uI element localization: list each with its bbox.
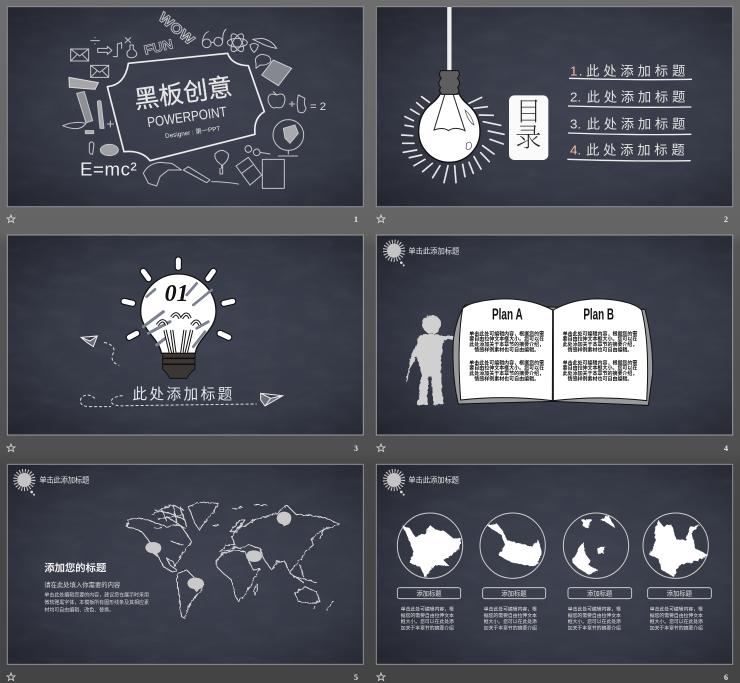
list item 1: 此 处 添 加 标 题 [586, 64, 685, 79]
formula: E=mc² [80, 159, 137, 180]
paper plane left [81, 336, 97, 347]
region circle 2 [480, 513, 545, 578]
contents card [509, 95, 548, 160]
column text 3: 单击此处可编辑内容，根 [568, 605, 621, 612]
doodle: globe [273, 120, 304, 156]
slide 1 star icon [7, 215, 15, 222]
heading: 添加您的标题 [44, 561, 107, 574]
chalk person [406, 315, 460, 405]
panel: slide 1 cover [7, 7, 363, 207]
slide 2 star icon [377, 215, 385, 222]
bulb glass [141, 274, 216, 353]
bulb rays [124, 260, 233, 337]
Plan B text: 单击此处可编辑内容，根据您的需 [563, 359, 637, 366]
slide 6 number: 6 [724, 673, 728, 682]
doodles: ruler, pencil, plus [77, 92, 113, 128]
doodle: apple and pear equation [268, 92, 326, 113]
body text [44, 592, 149, 614]
Plan A text: 要自由拉伸文本框大小。您可以在 [469, 365, 544, 372]
list item 3: 此 处 添 加 标 题 [587, 116, 685, 131]
Plan B text [563, 330, 637, 382]
right page [553, 299, 648, 401]
column text 3: 框大小。您可以在此处添 [568, 618, 621, 625]
slide 5 number: 5 [354, 673, 358, 682]
doodles: envelopes [71, 49, 109, 77]
Plan B text: 要自由拉伸文本框大小。您可以在 [563, 336, 637, 343]
doodle: glasses [202, 29, 226, 48]
doodles: stone, clip, leaf, eraser [63, 122, 118, 156]
body text: 材均可自由编辑、改色、替换。 [44, 607, 114, 614]
bulb scribble shading [143, 283, 212, 347]
doodle: FUN: FUN [142, 36, 174, 58]
column text 1 [401, 605, 454, 631]
panel: slide 4 plans [376, 235, 733, 435]
logo splat [15, 471, 35, 496]
label button 3 [568, 588, 632, 599]
slide 4 star icon [377, 444, 385, 452]
contents heading: 目 [515, 92, 541, 129]
doodle: tablet [262, 159, 284, 188]
left page [459, 299, 553, 401]
dashed trail [104, 342, 119, 365]
column text 4: 加关于本章节的摘要介绍 [650, 624, 703, 631]
Plan B text: 此处添加关于本章节的摘要介绍， [563, 341, 637, 348]
bulb cap [439, 71, 460, 94]
bulb base [163, 353, 195, 378]
Plan A text: 情感样例素材也可自由编辑。 [474, 346, 539, 353]
open book cover [453, 305, 653, 405]
doodle: stacked books [236, 157, 262, 185]
label button 1 [397, 588, 461, 599]
doodles: math and music symbols [91, 37, 137, 58]
list item 2: 此 处 添 加 标 题 [587, 90, 685, 105]
list item 2: 2. [570, 90, 581, 105]
list item 4: 4. [570, 142, 581, 157]
slide 5 star icon [7, 673, 15, 680]
subheading: 请在此处填入你需要的内容 [44, 580, 121, 589]
section title: 此处添加标题 [132, 386, 233, 403]
panel: slide 3 section title [7, 235, 363, 435]
body text: 单击此处编辑您要的内容，建议您在展示时采用 [44, 592, 149, 599]
Plan B text: 此处添加关于本章节的摘要介绍， [563, 370, 637, 377]
Plan B text: 单击此处可编辑内容，根据您的需 [563, 330, 637, 337]
column text 2: 框大小。您可以在此处添 [484, 618, 537, 625]
map markers [145, 512, 291, 592]
column text 4: 单击此处可编辑内容，根 [650, 605, 703, 612]
body text: 微软雅黑字体，本模板所有图形线条及其相应素 [44, 599, 149, 606]
filament [157, 314, 200, 354]
doodle: map scribble [143, 162, 182, 186]
column text 3: 据您的需要自由拉伸文本 [568, 612, 621, 619]
Plan A text: 单击此处可编辑内容，根据您的需 [469, 330, 544, 337]
label button 4: 添加标题 [667, 588, 693, 597]
subtitle: POWERPOINT [146, 103, 228, 130]
Plan A text: 要自由拉伸文本框大小。您可以在 [469, 336, 544, 343]
label button 2 [483, 588, 546, 599]
region circle 4 [643, 513, 708, 578]
column text 2: 单击此处可编辑内容，根 [484, 605, 537, 612]
bulb highlight [465, 110, 474, 150]
list item 3 [568, 116, 691, 135]
column text 1: 框大小。您可以在此处添 [401, 618, 454, 625]
cord [447, 7, 452, 72]
Plan B text: 情感样例素材也可自由编辑。 [568, 375, 632, 382]
slide title: 单击此添加标题 [408, 246, 460, 255]
logo splat [385, 242, 405, 266]
list item 2 [568, 90, 691, 107]
light rays [402, 97, 504, 183]
column text 3 [568, 605, 621, 631]
doodle: atom [227, 32, 247, 53]
number 01: 01 [165, 281, 189, 307]
title frame [107, 53, 264, 161]
doodle: speech bubble [255, 54, 271, 68]
column text 4: 框大小。您可以在此处添 [650, 618, 703, 625]
region circle 3 [563, 513, 629, 578]
column text 1: 据您的需要自由拉伸文本 [401, 612, 454, 619]
designer credit: Designer : 第一PPT [164, 123, 221, 140]
bulb filament [434, 95, 465, 131]
Plan A heading: Plan A [492, 307, 523, 324]
doodle: sheet music [69, 77, 98, 89]
column text 1: 加关于本章节的摘要介绍 [401, 624, 454, 631]
list item 4: 此 处 添 加 标 题 [586, 142, 685, 157]
label button 3: 添加标题 [587, 588, 613, 597]
contents heading second char: 录 [515, 118, 541, 155]
column text 2: 加关于本章节的摘要介绍 [484, 624, 537, 631]
Plan A text [469, 330, 544, 382]
Plan A text: 单击此处可编辑内容，根据您的需 [469, 359, 544, 366]
column text 2: 据您的需要自由拉伸文本 [484, 612, 537, 619]
doodle: brush and heart [250, 38, 277, 52]
light bulb [419, 94, 480, 162]
slide 4 number: 4 [724, 444, 728, 453]
Plan B text: 要自由拉伸文本框大小。您可以在 [563, 365, 637, 372]
doodle: WOW: WOW [156, 9, 198, 48]
slide 3 number: 3 [354, 444, 358, 453]
label button 2: 添加标题 [501, 588, 527, 597]
slide title: 单击此添加标题 [39, 476, 90, 485]
column text 3: 加关于本章节的摘要介绍 [568, 624, 621, 631]
column text 1: 单击此处可编辑内容，根 [401, 605, 454, 612]
Plan B text: 情感样例素材也可自由编辑。 [568, 346, 632, 353]
slide 6 star icon [377, 673, 385, 680]
logo splat [385, 471, 405, 496]
label button 4 [648, 588, 711, 599]
panel: slide 6 regions [376, 464, 733, 664]
doodle: small bulb [215, 150, 228, 174]
slide 1 number: 1 [354, 215, 358, 224]
world map outline [127, 502, 340, 618]
Plan A text: 此处添加关于本章节的摘要介绍， [469, 341, 544, 348]
title: 黑板创意 [133, 73, 234, 114]
dashed flight path [81, 395, 257, 407]
region circle 1 [397, 513, 463, 578]
column text 4: 据您的需要自由拉伸文本 [650, 612, 703, 619]
list item 1: 1. [570, 64, 582, 79]
Plan B heading: Plan B [583, 307, 614, 324]
slide 3 star icon [7, 444, 15, 452]
Plan A text: 情感样例素材也可自由编辑。 [474, 375, 539, 382]
Plan A text: 此处添加关于本章节的摘要介绍， [469, 370, 544, 377]
list item 4 [567, 142, 691, 161]
slide title: 单击此添加标题 [408, 476, 460, 485]
doodle: apple and pear equation: = 2 [310, 101, 326, 113]
paper plane right [261, 393, 283, 406]
label button 1: 添加标题 [416, 588, 442, 597]
doodle: spectacles [245, 146, 270, 156]
doodle: notebook [262, 60, 292, 86]
slide 2 number: 2 [724, 215, 728, 224]
list item 3: 3. [570, 116, 581, 131]
column text 4 [650, 605, 703, 631]
column text 2 [484, 605, 537, 631]
panel: slide 2 contents [376, 7, 733, 207]
doodle: pencil with scribble [183, 167, 238, 184]
panel: slide 5 world map [7, 464, 363, 664]
